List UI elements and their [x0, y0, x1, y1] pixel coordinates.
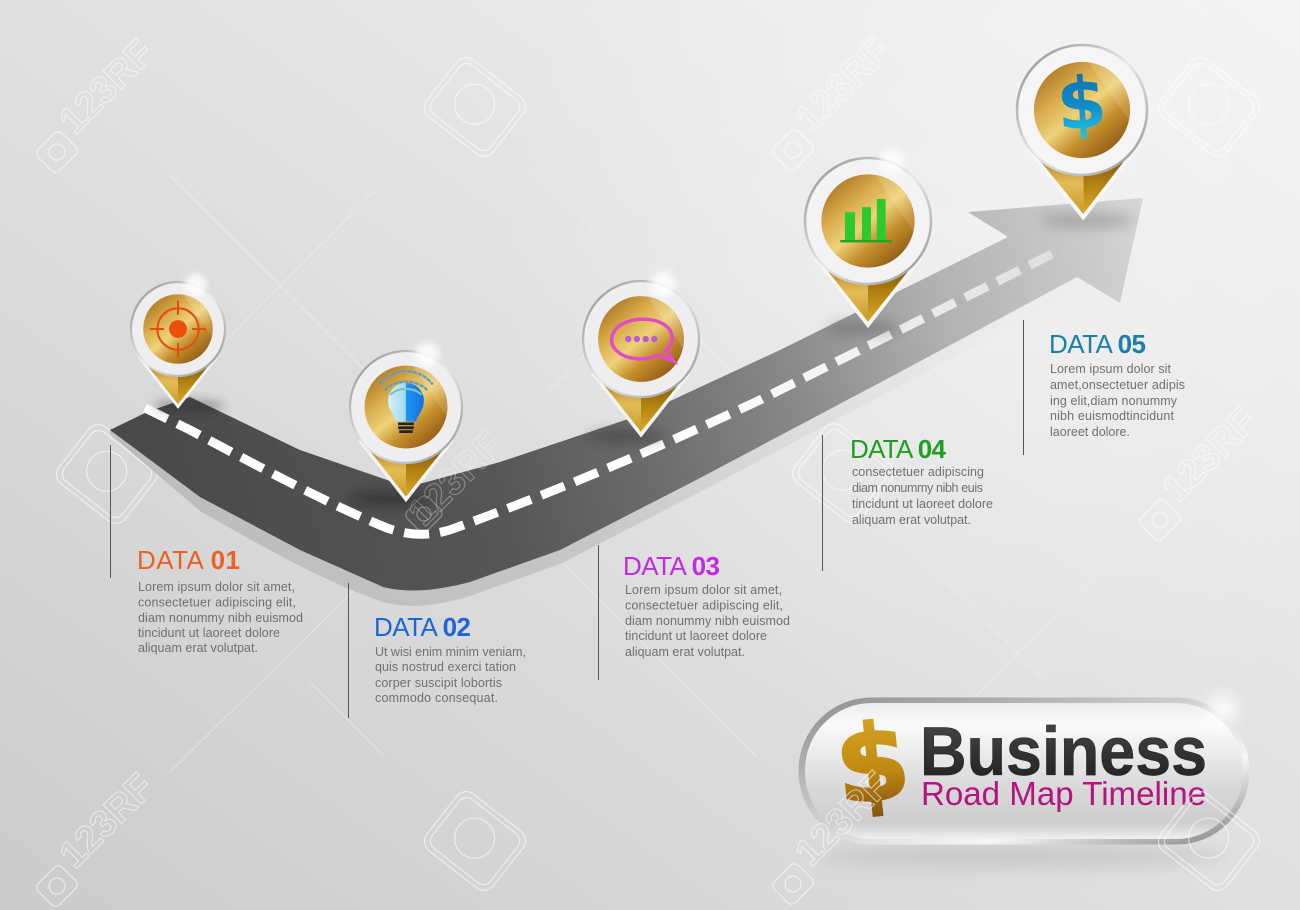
data 03 text: diam nonummy nibh euismod: [625, 614, 790, 628]
data 03 text: [625, 583, 790, 659]
data 02 block: [348, 583, 526, 718]
pin 5: dollar: [1017, 45, 1147, 227]
data 02 heading: DATA 02: [374, 612, 471, 642]
title: Business: Business: [920, 713, 1207, 790]
icon: bar chart: [840, 199, 892, 242]
data 01 text: [138, 580, 303, 655]
data 01 heading: DATA 01: [137, 545, 240, 575]
data 05 text: [1050, 362, 1185, 439]
subtitle: Road Map Timeline: Road Map Timeline: [921, 775, 1206, 812]
data 04 block: [822, 434, 993, 571]
watermarks: 123RF: [52, 32, 162, 142]
data 01 text: aliquam erat volutpat.: [138, 641, 258, 655]
data 05 text: Lorem ipsum dolor sit: [1050, 362, 1172, 376]
road centre dashes: [145, 249, 1062, 534]
icon: dollar sign: $: [1054, 61, 1109, 147]
data 02 text: Ut wisi enim minim veniam,: [375, 645, 526, 659]
data 04 text: [852, 465, 993, 527]
data 01 block: [110, 445, 303, 655]
data 05 block: [1024, 320, 1185, 455]
road with arrow: [110, 198, 1143, 606]
data 02 text: commodo consequat.: [375, 691, 498, 705]
data 01 text: diam nonummy nibh euismod: [138, 611, 303, 625]
data 01 text: consectetuer adipiscing elit,: [138, 596, 296, 610]
icon: gold dollar sign: $: [830, 700, 915, 829]
data 05 text: laoreet dolore.: [1050, 425, 1130, 439]
data 05 text: amet,onsectetuer adipis: [1050, 378, 1185, 392]
pin 3: speech bubble: [583, 272, 699, 443]
data 03 text: Lorem ipsum dolor sit amet,: [625, 583, 782, 597]
road surface: [110, 198, 1143, 591]
watermarks: 123RF: [52, 766, 162, 876]
watermarks: 123RF: [788, 30, 898, 140]
data 02 text: [375, 645, 526, 705]
watermarks over badge: [770, 764, 1264, 907]
data 02 text: corper suscipit lobortis: [375, 676, 502, 690]
icon: light bulb with signal: [379, 371, 433, 432]
data 04 text: consectetuer adipiscing: [852, 465, 984, 479]
icon: speech bubble: [612, 319, 673, 361]
data 04 text: aliquam erat volutpat.: [852, 513, 971, 527]
pin 1: target: [131, 274, 225, 413]
data 01 text: Lorem ipsum dolor sit amet,: [138, 580, 295, 594]
watermark over road: 123RF: [401, 424, 511, 534]
data 05 heading: DATA 05: [1049, 329, 1146, 359]
pin 2: light bulb: [348, 342, 462, 507]
data 03 text: tincidunt ut laoreet dolore: [625, 629, 767, 643]
watermarks: 123RF: [1155, 400, 1265, 510]
icon: target: [150, 301, 206, 357]
title badge: [798, 695, 1250, 867]
data 05 text: ing elit,diam nonummy: [1050, 394, 1178, 408]
data 05 text: nibh euismodtincidunt: [1050, 409, 1175, 423]
data 04 text: diam nonummy nibh euis: [852, 481, 983, 495]
data 03 block: [598, 545, 790, 680]
data 02 text: quis nostrud exerci tation: [375, 660, 516, 674]
data 03 text: aliquam erat volutpat.: [625, 645, 745, 659]
data 04 heading: DATA 04: [850, 434, 947, 464]
data 03 heading: DATA 03: [623, 551, 720, 581]
data 03 text: consectetuer adipiscing elit,: [625, 598, 783, 612]
road shadow: [110, 270, 1077, 606]
watermarks over badge: 123RF: [788, 764, 898, 874]
data 04 text: tincidunt ut laoreet dolore: [852, 497, 993, 511]
data 01 text: tincidunt ut laoreet dolore: [138, 626, 280, 640]
pin 4: bar chart: [805, 149, 931, 334]
